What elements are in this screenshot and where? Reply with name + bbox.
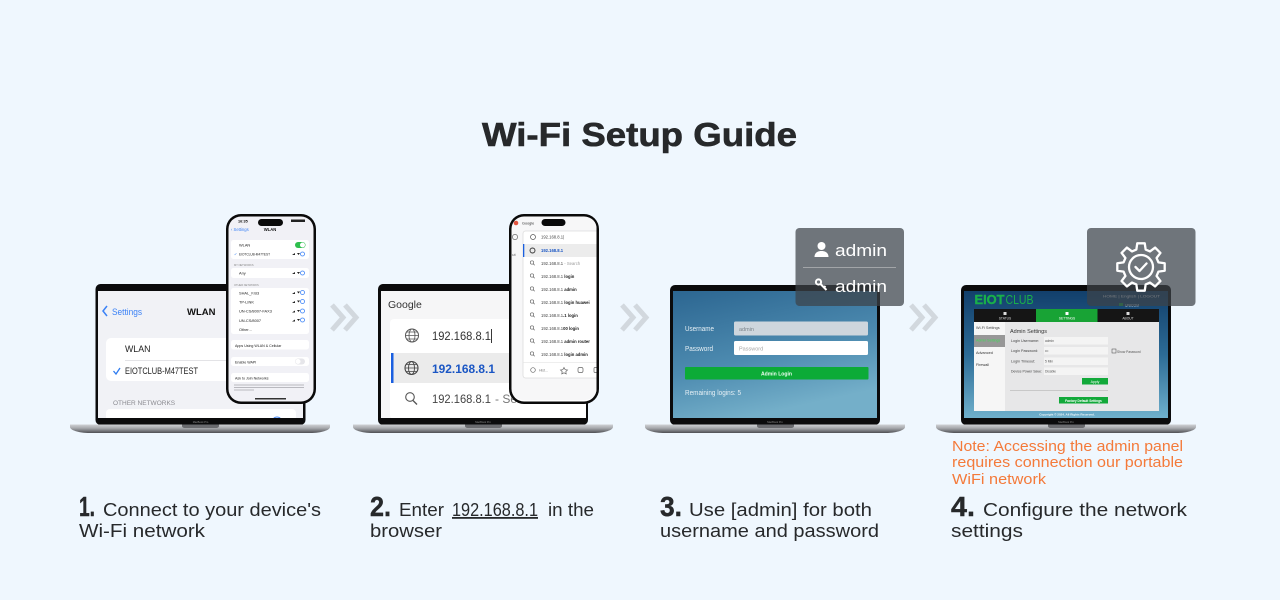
step 2 caption: 192.168.8.1	[452, 500, 538, 520]
laptop 2: 192.168.8.1	[432, 362, 495, 376]
laptop 3: Admin Login	[761, 372, 793, 378]
laptop 2: 192.168.8.1	[432, 392, 491, 406]
icon: user	[814, 242, 828, 257]
step 1 caption: 1.	[79, 491, 95, 522]
phone 2: 192.168.8.1.1 login	[541, 313, 578, 318]
step 3 caption: username and password	[660, 521, 879, 541]
phone 2: 192.168.8.1 - Search	[541, 261, 581, 266]
laptop 4: Login Password:	[1011, 349, 1038, 353]
arrow 1	[332, 305, 356, 330]
title: Wi-Fi Setup Guide	[482, 117, 797, 154]
laptop 4: CLUB	[1006, 292, 1034, 307]
laptop 4: UNICOM	[1125, 304, 1139, 308]
laptop 2: Google	[388, 299, 422, 311]
phone 1: UN-CS/8007-FAX3	[239, 308, 272, 314]
laptop 3: Password	[685, 346, 713, 353]
laptop 3: MacBook Pro	[767, 420, 783, 424]
laptop 1: OTHER NETWORKS	[113, 400, 176, 407]
laptop 1: WLAN	[187, 307, 216, 318]
step 1 caption: Connect to your device's	[103, 500, 321, 520]
laptop 1: MacBook Pro	[193, 420, 209, 424]
phone 1: 16:35	[238, 220, 248, 224]
laptop 1: WLAN	[125, 344, 150, 354]
phone 1: WLAN	[239, 242, 250, 248]
phone 1: MY NETWORKS	[234, 263, 254, 267]
step 4 caption: settings	[951, 521, 1023, 541]
laptop 4: ABOUT	[1122, 316, 1134, 320]
laptop 4: Admin Settings	[976, 338, 1000, 342]
phone 1: ‹ Settings	[231, 227, 249, 232]
credentials panel: admin	[835, 241, 887, 260]
laptop 1: EIOTCLUB-M47TEST	[125, 366, 199, 376]
step 2 caption: Enter	[399, 500, 444, 520]
laptop 2: 192.168.8.1	[432, 329, 491, 343]
laptop 4: STATUS	[999, 316, 1012, 320]
step 3 illustration: laptop login page	[645, 228, 905, 433]
laptop 4: Login Timeout:	[1011, 360, 1035, 364]
laptop 4: Advanced	[976, 351, 993, 355]
phone 2: 192.168.8.1 admin router	[541, 339, 590, 344]
phone 1: UN-CS/8007	[239, 318, 261, 323]
laptop 2: MacBook Pro	[475, 420, 491, 424]
laptop 4: Copyright © 2024. All Rights Reserved.	[1039, 412, 1095, 416]
arrow 2	[622, 305, 646, 330]
phone 1: SHAL_F.B3	[239, 290, 259, 296]
laptop 2: - Search	[495, 392, 540, 406]
laptop 4: Factory Default Settings	[1065, 399, 1102, 403]
arrow 3	[911, 305, 935, 330]
step 2 caption: browser	[370, 521, 442, 541]
laptop 2	[353, 284, 613, 433]
laptop 4: Wi-Fi Settings	[976, 326, 1000, 330]
laptop 1: Settings	[112, 307, 142, 318]
phone 2: Hist...	[539, 368, 548, 372]
laptop 4: Login Username:	[1011, 339, 1039, 343]
phone 1: TP-LINK	[239, 300, 254, 304]
note: Note: Accessing the admin panel	[952, 439, 1183, 455]
gear panel	[1087, 228, 1196, 306]
phone 1: Any	[239, 270, 246, 276]
step 3 caption	[660, 491, 879, 541]
laptop 4: EIOT	[974, 292, 1005, 307]
laptop 4: Disable	[1045, 370, 1056, 374]
laptop 4: 5 Min	[1045, 360, 1053, 364]
note: WiFi network	[952, 472, 1047, 488]
laptop 4: Admin Settings	[1010, 329, 1047, 335]
icon: gear with check	[1117, 243, 1165, 291]
step 4 caption	[951, 491, 1188, 541]
step 3 caption: Use [admin] for both	[689, 500, 872, 520]
phone 2: 192.168.8.1 login	[541, 274, 575, 279]
step 1 illustration: laptop and phone WLAN settings	[70, 214, 330, 433]
laptop 4: SETTINGS	[1059, 316, 1076, 320]
phone 1: Enable WAPI	[235, 360, 256, 364]
step 4 illustration: laptop admin settings	[936, 228, 1196, 433]
laptop 4	[936, 285, 1196, 433]
laptop 3: Username	[685, 326, 714, 333]
laptop 3: Remaining logins: 5	[685, 390, 741, 397]
panel-overlapped header links: HOME | English | LOGOUT	[1103, 294, 1161, 298]
laptop 4: Apply	[1091, 380, 1100, 384]
phone 1	[226, 214, 316, 404]
note	[952, 439, 1183, 488]
laptop 3: Password	[739, 346, 763, 352]
laptop 4: Firewall	[976, 363, 989, 367]
phone 2: 192.168.8.1 admin	[541, 287, 577, 292]
step 2 caption: 2.	[370, 491, 391, 522]
note: requires connection our portable	[952, 455, 1183, 471]
laptop 4: admin	[1045, 339, 1054, 343]
phone 2: Google	[522, 222, 534, 226]
laptop 4: Show Password	[1117, 350, 1141, 354]
step 1 caption: Wi-Fi network	[79, 521, 206, 541]
step 4 caption: Configure the network	[983, 500, 1188, 520]
phone 1: Other...	[239, 327, 252, 332]
step 2 caption: in the	[548, 500, 594, 520]
step 3 caption: 3.	[660, 491, 682, 522]
step 1 caption	[79, 491, 321, 541]
phone 2	[509, 214, 599, 404]
laptop 3: admin	[739, 327, 754, 333]
laptop 1	[70, 284, 330, 433]
phone 2: 192.168.8.100 login	[541, 326, 579, 331]
step 2 illustration: laptop and phone browser	[353, 214, 613, 433]
laptop 4: Device Power Save:	[1011, 370, 1042, 374]
step 4 caption: 4.	[951, 491, 975, 522]
phone 2: 192.168.8.1	[541, 248, 564, 253]
phone 1: EIOTCLUB-M47TEST	[239, 252, 271, 256]
icon: key	[816, 279, 826, 290]
laptop 4: •••	[1045, 349, 1049, 353]
step 2 caption	[370, 491, 594, 541]
phone 1: WLAN	[264, 227, 276, 232]
phone 2: 192.168.8.1 login admin	[541, 352, 588, 357]
laptop 4: MacBook Pro	[1058, 420, 1074, 424]
phone 2: 192.168.8.1|	[541, 234, 564, 240]
credentials panel: admin	[835, 277, 887, 296]
laptop 3	[645, 285, 905, 433]
phone 1: Ask to Join Networks	[235, 376, 269, 380]
credentials panel	[796, 228, 904, 306]
phone 2: out	[510, 252, 516, 257]
phone 2: 192.168.8.1 login huawei	[541, 300, 590, 305]
phone 1: OTHER NETWORKS	[234, 283, 259, 287]
phone 1: Apps Using WLAN & Cellular	[235, 344, 282, 348]
phone 1: ✓	[234, 252, 237, 256]
